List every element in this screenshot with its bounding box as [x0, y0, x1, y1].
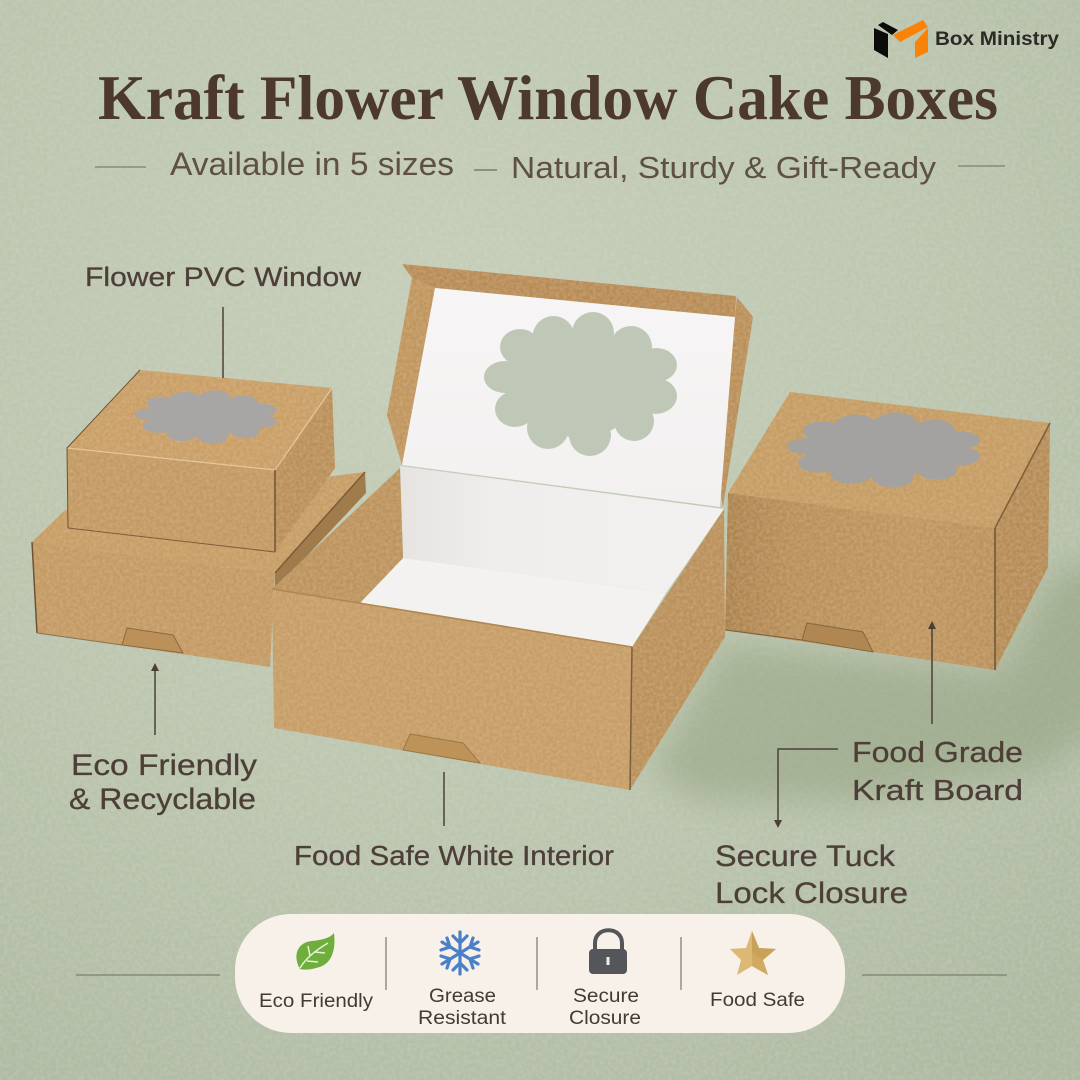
label: Eco Friendly & Recyclable: & Recyclable [69, 783, 256, 816]
logo: Box Ministry: Box Ministry [935, 29, 1059, 50]
label: Secure Tuck Lock Closure: Lock Closure [715, 877, 908, 910]
badge: Grease Resistant: Resistant [418, 1008, 507, 1029]
title: Kraft Flower Window Cake Boxes [98, 62, 998, 133]
label: Food Grade Kraft Board: Food Grade [852, 737, 1023, 769]
label: Secure Tuck Lock Closure [715, 749, 908, 910]
label: Eco Friendly & Recyclable [69, 663, 257, 816]
subtitle row: Available in 5 sizes [170, 146, 454, 182]
label: Food Grade Kraft Board: Kraft Board [852, 775, 1023, 807]
badge: Grease Resistant [418, 932, 507, 1029]
badge: Secure Closure: Secure [573, 986, 639, 1007]
label: Eco Friendly & Recyclable: Eco Friendly [71, 749, 257, 782]
box: large left bottom box [32, 472, 366, 667]
badge: Eco Friendly: Eco Friendly [259, 990, 373, 1012]
logo: Box Ministry [874, 20, 1059, 58]
box interior [272, 466, 724, 647]
box: right box with flower window [725, 392, 1050, 670]
badge: Grease Resistant: Grease [429, 986, 496, 1007]
label: Food Grade Kraft Board [852, 621, 1023, 807]
label: Flower PVC Window: Flower PVC Window [85, 262, 362, 292]
badge: Food Safe [710, 931, 805, 1011]
box: center open box [272, 264, 753, 790]
box shadows [650, 560, 1080, 800]
badge: Food Safe: Food Safe [710, 989, 805, 1011]
subtitle row: Natural, Sturdy & Gift-Ready [511, 150, 937, 185]
label: Secure Tuck Lock Closure: Secure Tuck [715, 840, 896, 873]
dividers [386, 937, 681, 990]
box: small top box with flower window [67, 370, 335, 552]
label: Food Safe White Interior: Food Safe White Interior [294, 840, 614, 871]
badge: Secure Closure [569, 930, 641, 1029]
badge: Secure Closure: Closure [569, 1008, 641, 1029]
subtitle row [95, 146, 1005, 185]
panel: feature badges [235, 914, 845, 1033]
bottom side rules [76, 974, 1007, 976]
box front and side [272, 509, 725, 790]
badge: Eco Friendly [259, 933, 373, 1012]
open lid [387, 264, 753, 507]
